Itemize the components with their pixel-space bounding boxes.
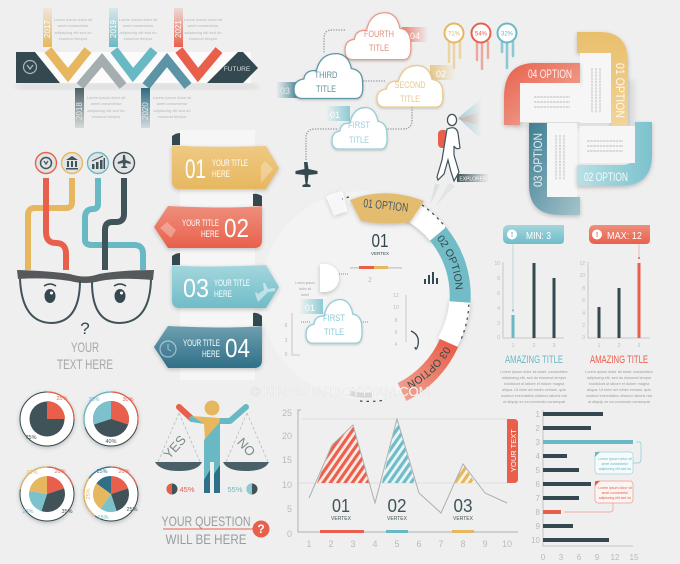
row labels (531, 410, 541, 545)
bar chart: min: 0 (497, 335, 500, 341)
ribbon 02: 02 (224, 213, 249, 243)
question badge (163, 520, 270, 538)
paragraph (500, 370, 568, 404)
question text: YOUR QUESTION (162, 513, 250, 529)
mini axis right: 8 (395, 318, 398, 324)
badge 71%: 71% (448, 32, 461, 38)
timeline start arrow with icon (16, 52, 60, 83)
x axis labels: 6 (416, 539, 422, 549)
explorer figure (430, 98, 489, 207)
timeline captions: adipiscing elit sed do (119, 30, 157, 35)
cloud: fourth title: FOURTH (364, 29, 394, 40)
bottom ring smudge (350, 393, 372, 395)
bar chart: max (579, 225, 653, 404)
timeline captions: adipiscing elit sed do (87, 108, 125, 113)
year tab 2021: 2021 (174, 20, 183, 38)
timeline captions: Lorem ipsum dolor sit (184, 17, 223, 22)
faded semicircle note: amet (301, 293, 309, 297)
paragraph: ut aliquip ex ea commodo consequat (588, 400, 651, 404)
ribbon 04: YOUR TITLE (183, 338, 220, 348)
pinwheel option panel (504, 32, 652, 215)
ribbon 01: 01 (185, 154, 206, 184)
timeline panel (16, 8, 258, 128)
curved dark mark (411, 331, 418, 349)
cloud: first title: 01 (330, 110, 340, 120)
ribbon 04 (154, 313, 262, 368)
axis labels: 9 (595, 553, 600, 562)
row labels: 10 (531, 536, 541, 545)
min tag: ! (511, 232, 513, 239)
pie 25/75: 25% (56, 396, 68, 402)
small cloud: first title: FIRST (323, 313, 345, 323)
mini axis right: 12 (393, 293, 399, 299)
cloud: fourth title: TITLE (369, 43, 389, 54)
red callout: Lorem ipsum dolor sit (598, 486, 632, 490)
bar chart: max: 8 (582, 286, 585, 292)
ring edge ticks (342, 197, 469, 401)
glasses caption: YOUR (71, 339, 99, 355)
y axis labels: 25 (282, 408, 292, 418)
vertex 01 label: VERTEX (371, 251, 389, 256)
x axis labels (306, 539, 512, 549)
pie 20/35/23/22: 20% (54, 469, 66, 475)
timeline captions: amet consectetur (188, 23, 219, 28)
timeline captions: adipiscing elit sed do (54, 30, 92, 35)
mini axis left (285, 313, 300, 358)
balance scale figure (155, 400, 270, 547)
ribbon 03 (172, 253, 279, 308)
vertex 03: 03 (454, 496, 472, 516)
person (179, 400, 246, 493)
mini axis left: 3 (285, 338, 288, 344)
ribbon 02: YOUR TITLE (182, 218, 219, 228)
vertex 01: 01 (332, 496, 350, 516)
bar chart: max: 6 (582, 298, 585, 304)
timeline captions: amet consectetur (123, 23, 154, 28)
icon: growth chart badge (88, 152, 108, 174)
max tag (589, 225, 650, 244)
pie 20/25/15/25/15: 25% (126, 507, 138, 513)
mini axis right: 6 (395, 330, 398, 336)
cloud: fourth title (345, 13, 428, 60)
paragraph: adipiscing elit, sed do eiusmod tempor (502, 376, 567, 380)
bar chart: min: 3 (553, 343, 556, 349)
hatched area 02 (382, 419, 415, 483)
x axis labels: 10 (502, 539, 512, 549)
ribbon 01: HERE (212, 169, 230, 179)
network lines (28, 178, 143, 270)
icon: clock badge (36, 152, 56, 174)
55% indicator: 55% (227, 485, 243, 494)
paragraph: Lorem ipsum dolor sit amet, consectetur (585, 370, 653, 374)
red callout: adipiscing elit sed do (599, 496, 631, 500)
mini axis right: 10 (393, 305, 399, 311)
question text (162, 513, 250, 547)
pie 20/25/15/25/15: 25% (86, 488, 92, 500)
45% indicator (166, 484, 195, 494)
paragraph: Lorem ipsum dolor sit amet, consectetur (500, 370, 568, 374)
pie 30/40/30: 30% (88, 397, 100, 403)
watermark: © KIRPIOTARBOYTYAM.COM (251, 384, 429, 399)
paragraph: adipiscing elit, sed do eiusmod tempor (587, 376, 652, 380)
data line (309, 419, 507, 513)
option 04 band (504, 63, 580, 125)
paragraph: incididunt ut labore et dolore magna (589, 382, 650, 386)
option 03 ring segment: 03 OPTION (407, 347, 450, 388)
timeline captions: eiusmod tempor (92, 114, 121, 119)
ribbon 01: YOUR TITLE (212, 158, 248, 168)
question text: WILL BE HERE (166, 531, 246, 547)
timeline captions: eiusmod tempor (59, 36, 88, 41)
max tag: MAX: 12 (607, 230, 642, 242)
question mark: ? (80, 319, 90, 338)
bars (543, 412, 633, 542)
cloud: third title: THIRD (314, 70, 338, 81)
x axis labels: 9 (482, 539, 488, 549)
pie 20/35/23/22: 35% (61, 509, 73, 515)
badge 32%: 32% (501, 32, 514, 38)
glasses caption (57, 339, 113, 372)
mini axis left: 6 (285, 323, 288, 329)
cloud: fourth title: 04 (410, 31, 420, 41)
axis labels: 3 (559, 553, 564, 562)
timeline captions: amet consectetur (91, 101, 122, 106)
faded semicircle note (295, 264, 349, 297)
ribbon 02 (154, 194, 262, 248)
min tag: MIN: 3 (526, 230, 551, 242)
ring white segments (330, 201, 460, 343)
axis labels: 15 (630, 553, 639, 562)
icon: airplane (296, 162, 318, 187)
row labels: 4 (536, 452, 541, 461)
pie 30/40/30: 30% (122, 397, 134, 403)
question badge: ? (257, 522, 265, 536)
drip percentage badges (444, 24, 516, 69)
x axis labels: 1 (306, 539, 312, 549)
explorer tag: EXPLORER (459, 176, 487, 182)
pans (155, 462, 269, 471)
faded semicircle note: dolor sit (299, 287, 311, 291)
year tab 2019 (109, 8, 118, 47)
timeline captions: amet consectetur (58, 23, 89, 28)
cloud: first title: FIRST (348, 120, 370, 130)
bars (598, 263, 640, 338)
timeline captions (54, 17, 223, 119)
vertex 01 label (350, 231, 402, 284)
timeline captions: Lorem ipsum dolor sit (153, 95, 192, 100)
option 02 band (577, 122, 652, 186)
glasses caption: TEXT HERE (57, 356, 113, 372)
red callout (564, 481, 633, 512)
left eye (44, 284, 56, 303)
row labels: 2 (536, 424, 541, 433)
option 01 ring segment: 01 OPTION (363, 196, 409, 215)
axis labels: 12 (611, 553, 620, 562)
paragraph (585, 370, 653, 404)
45% indicator: 45% (179, 485, 195, 494)
pie 20/35/23/22 (20, 467, 74, 521)
vertex 01: VERTEX (331, 516, 352, 522)
horizontal bar chart (531, 410, 641, 562)
teal callout: amet consectetur (602, 462, 629, 466)
yes / no labels: YES (160, 432, 189, 462)
ribbon list (154, 130, 279, 380)
timeline captions: Lorem ipsum dolor sit (54, 17, 93, 22)
x axis labels: 3 (350, 539, 356, 549)
bar chart: min: 1 (512, 343, 515, 349)
option 04 band: 04 OPTION (528, 67, 572, 81)
small cloud: first title: TITLE (324, 327, 344, 337)
axis labels (541, 553, 639, 562)
ribbon 04: HERE (202, 349, 220, 359)
small cloud: first title (299, 299, 368, 343)
ribbon 04: 04 (225, 333, 250, 363)
vertex 03: VERTEX (453, 516, 474, 522)
vertex 01 label: 01 (372, 231, 388, 251)
year tab 2018 (75, 88, 84, 128)
glasses (17, 270, 154, 323)
bar chart: min: 6 (497, 291, 500, 297)
icon: bank badge (62, 152, 82, 174)
ribbon 03: HERE (214, 289, 232, 299)
cloud: second title (377, 65, 456, 107)
pie 25/75: 75% (25, 435, 37, 441)
cloud: second title: SECOND (394, 80, 426, 91)
y axis labels (282, 408, 292, 539)
bar chart: min: 4 (497, 306, 500, 312)
red callout: amet consectetur (602, 491, 629, 495)
year tab 2017: 2017 (43, 20, 52, 38)
circular option ring (284, 191, 472, 402)
pie 20/25/15/25/15: 15% (96, 469, 108, 475)
option 01 band (577, 32, 628, 126)
pie 30/40/30 (84, 392, 138, 446)
option 03 band: 03 OPTION (531, 133, 545, 187)
paragraph: ut aliquip ex ea commodo consequat (503, 400, 566, 404)
row labels: 6 (536, 480, 541, 489)
bar chart: max: 3 (638, 343, 641, 349)
ribbon 03: YOUR TITLE (214, 278, 250, 288)
line chart (282, 408, 518, 549)
mini axis right: 4 (395, 342, 398, 348)
pie 20/25/15/25/15: 15% (97, 515, 109, 521)
option 03 band (529, 123, 580, 215)
option 02 band: 02 OPTION (584, 170, 628, 184)
range markers (320, 530, 474, 533)
year tab 2020: 2020 (141, 102, 150, 120)
teal callout: Lorem ipsum dolor sit (598, 457, 632, 461)
dashed strings (158, 413, 268, 462)
x axis labels: 7 (438, 539, 444, 549)
icon: mini bar chart (424, 272, 438, 284)
option 01 ring segment (350, 193, 424, 224)
bar chart: max: 0 (582, 335, 585, 341)
teal callout: adipiscing elit sed do (599, 467, 631, 471)
bar chart: min (494, 225, 568, 404)
vertex 02: VERTEX (387, 516, 408, 522)
teal callout (595, 442, 641, 474)
pie 20/25/15/25/15 (84, 467, 138, 521)
option 01 band: 01 OPTION (613, 63, 627, 118)
mini axis right (393, 293, 406, 348)
icon: plane badge (114, 152, 134, 174)
pie charts (20, 392, 138, 521)
bars (512, 263, 556, 338)
glasses network (17, 152, 154, 372)
x axis labels: 2 (328, 539, 334, 549)
row labels: 5 (536, 466, 541, 475)
bar chart: max: 2 (582, 323, 585, 329)
axis labels: 0 (541, 553, 546, 562)
your text tag (507, 419, 518, 483)
pie 20/35/23/22: 22% (26, 470, 38, 476)
y axis labels: 0 (287, 529, 292, 539)
vertex 02: 02 (388, 496, 406, 516)
timeline captions: adipiscing elit sed do (153, 108, 191, 113)
min tag (503, 225, 564, 244)
option 02 ring segment: 02 OPTION (438, 236, 463, 290)
timeline captions: eiusmod tempor (124, 36, 153, 41)
cloud: third title: 03 (280, 86, 290, 96)
pie 25/75 (20, 392, 74, 446)
year tab 2021 (174, 8, 183, 47)
year tab 2019: 2019 (109, 20, 118, 38)
paragraph: nostrud exercitation ullamco laboris nisi (586, 394, 652, 398)
55% indicator (227, 484, 258, 494)
heading: AMAZING TITLE (590, 354, 648, 366)
timeline captions: eiusmod tempor (189, 36, 218, 41)
row labels: 3 (536, 438, 541, 447)
yes / no labels (160, 432, 258, 462)
option 03 ring segment (398, 339, 458, 401)
pie 20/35/23/22: 23% (22, 509, 34, 515)
max tag: ! (596, 232, 598, 239)
x axis labels: 8 (460, 539, 466, 549)
bar chart: max: 1 (598, 343, 601, 349)
hatched area 03 (455, 464, 475, 483)
timeline future arrow: FUTURE (224, 66, 251, 73)
y axis labels: 10 (282, 480, 292, 490)
cloud: first title: TITLE (349, 135, 369, 145)
yes / no labels: NO (234, 435, 258, 459)
ribbon 02: HERE (201, 229, 219, 239)
bar chart: min: 2 (533, 343, 536, 349)
pie 30/40/30: 40% (105, 439, 117, 445)
mini axis left: 0 (285, 352, 288, 358)
bar chart: min: 10 (494, 261, 500, 267)
small cloud: first title: 01 (305, 303, 315, 313)
y axis labels: 20 (282, 431, 292, 441)
pie 20/25/15/25/15: 20% (118, 469, 130, 475)
timeline captions: eiusmod tempor (158, 114, 187, 119)
bar chart: max: 2 (618, 343, 621, 349)
y axis labels: 15 (282, 455, 292, 465)
chevrons (48, 50, 219, 86)
cloud flow diagram (276, 13, 456, 187)
row labels: 9 (536, 522, 541, 531)
badge 54%: 54% (475, 32, 488, 38)
x axis labels: 5 (394, 539, 400, 549)
bar chart: min: 8 (497, 276, 500, 282)
x axis labels: 4 (372, 539, 378, 549)
timeline captions: amet consectetur (157, 101, 188, 106)
row labels: 7 (536, 494, 541, 503)
timeline future arrow (207, 52, 258, 83)
timeline captions: adipiscing elit sed do (184, 30, 222, 35)
paragraph: aliqua. Ut enim ad minim veniam, quis (502, 388, 566, 392)
timeline captions: Lorem ipsum dolor sit (119, 17, 158, 22)
cloud: first title (326, 106, 387, 149)
axis labels: 6 (577, 553, 582, 562)
cloud: second title: 02 (436, 69, 446, 79)
ribbon 01 (172, 133, 279, 189)
cloud: second title: TITLE (400, 94, 420, 105)
year tab 2018: 2018 (75, 102, 84, 120)
heading: AMAZING TITLE (505, 354, 563, 366)
option 02 ring segment (430, 227, 471, 303)
paragraph: incididunt ut labore et dolore magna (504, 382, 565, 386)
bar chart: max: 10 (579, 273, 585, 279)
backpack (438, 130, 448, 148)
year tab 2017 (43, 8, 52, 47)
timeline captions: Lorem ipsum dolor sit (87, 95, 126, 100)
row labels: 8 (536, 508, 541, 517)
y axis labels: 5 (287, 504, 292, 514)
cloud: third title (276, 54, 363, 98)
bar chart: max: 12 (579, 261, 585, 267)
row labels: 1 (536, 410, 541, 419)
bar chart: max: 4 (582, 311, 585, 317)
ribbon 03: 03 (183, 273, 209, 303)
year tab 2020 (141, 88, 150, 128)
cloud: third title: TITLE (316, 84, 336, 95)
hatched area 01 (317, 425, 369, 483)
bar chart: min: 2 (497, 321, 500, 327)
paragraph: aliqua. Ut enim ad minim veniam, quis (587, 388, 651, 392)
vertex 01 label: 2 (368, 277, 372, 284)
right eye (114, 284, 126, 303)
paragraph: nostrud exercitation ullamco laboris nisi (501, 394, 567, 398)
your text tag: YOUR TEXT (509, 429, 518, 472)
faded semicircle note: Lorem ipsum (295, 281, 315, 285)
